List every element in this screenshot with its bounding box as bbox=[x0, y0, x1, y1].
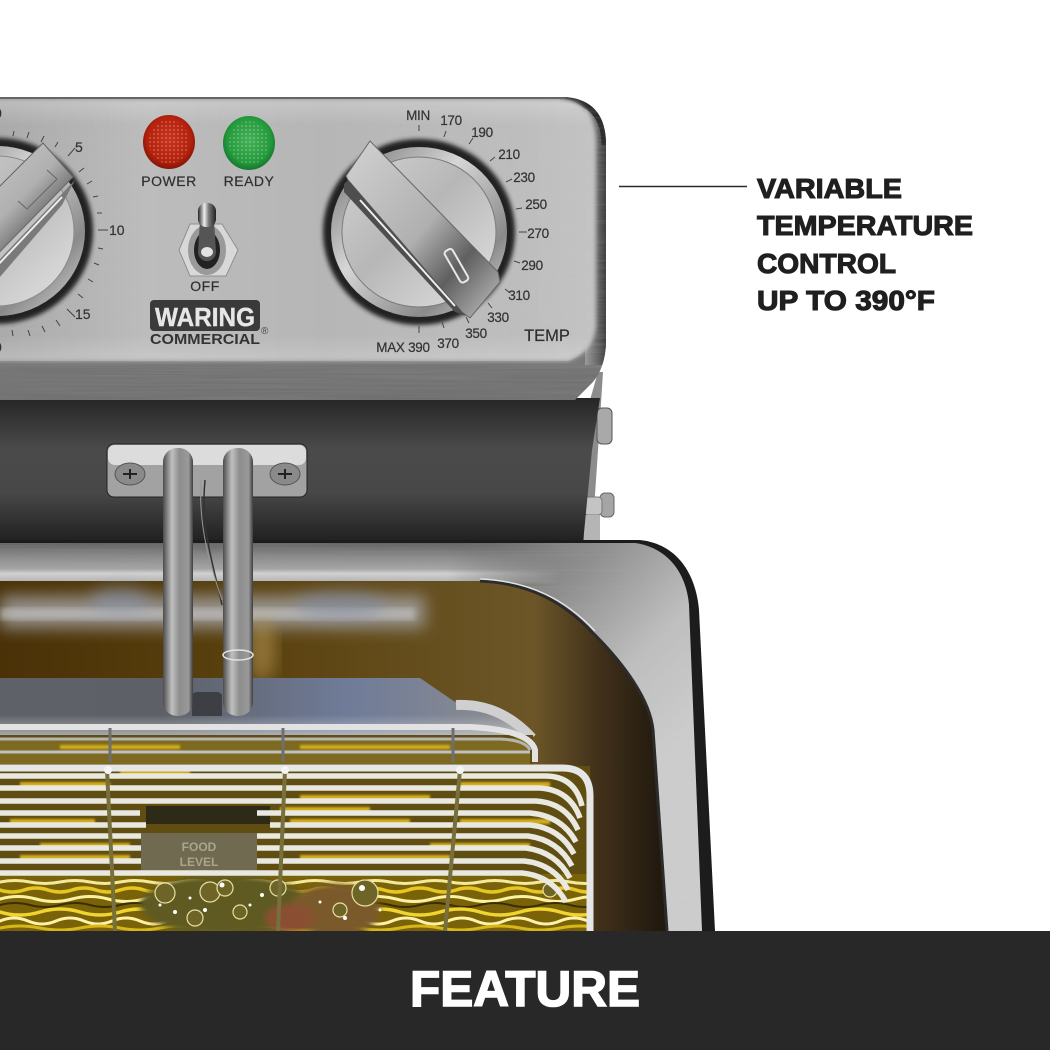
toggle switch: OFF bbox=[190, 278, 220, 294]
callout leader line bbox=[619, 186, 747, 188]
food level plate bbox=[141, 806, 270, 871]
temperature scale: 330 bbox=[487, 310, 509, 325]
front basket bbox=[0, 766, 590, 931]
toggle switch bbox=[179, 203, 238, 294]
temperature scale: 210 bbox=[498, 147, 520, 162]
waring commercial logo: ® bbox=[261, 326, 269, 337]
heating element tubes bbox=[163, 448, 253, 716]
indicator light: power: POWER bbox=[141, 173, 197, 189]
temperature scale: 170 bbox=[440, 113, 462, 128]
indicator light: ready: READY bbox=[224, 173, 275, 189]
left timer scale: 10 bbox=[109, 222, 125, 238]
oil and frying food bbox=[0, 735, 612, 936]
temperature scale: 270 bbox=[527, 226, 549, 241]
fryer rear bolts bbox=[578, 372, 614, 540]
temperature scale: MIN bbox=[406, 108, 430, 123]
temperature scale: 250 bbox=[525, 197, 547, 212]
temperature scale: 310 bbox=[508, 288, 530, 303]
indicator light: ready bbox=[223, 116, 275, 189]
waring commercial logo bbox=[150, 300, 269, 348]
callout text: TEMPERATURE bbox=[757, 210, 973, 241]
temperature scale bbox=[376, 108, 570, 355]
heating element bracket bbox=[107, 444, 307, 497]
rear basket bbox=[0, 727, 535, 762]
fryer dark body bbox=[0, 398, 600, 543]
control panel bbox=[0, 95, 610, 405]
rear basket plate bbox=[0, 678, 535, 745]
left timer scale: 5 bbox=[75, 139, 83, 155]
temperature scale: 350 bbox=[465, 326, 487, 341]
waring commercial logo: COMMERCIAL bbox=[150, 331, 260, 348]
footer bar bbox=[0, 931, 1050, 1050]
indicator light: power bbox=[141, 115, 197, 189]
temperature scale: 370 bbox=[437, 336, 459, 351]
fry tank bbox=[0, 540, 716, 931]
left timer scale: 15 bbox=[75, 306, 91, 322]
temperature scale: 290 bbox=[521, 258, 543, 273]
callout text: VARIABLE bbox=[757, 173, 902, 204]
left timer scale bbox=[0, 105, 125, 355]
waring commercial logo: WARING bbox=[155, 302, 255, 332]
callout text: UP TO 390°F bbox=[757, 285, 935, 316]
left timer dial bbox=[0, 138, 93, 324]
food level plate: LEVEL bbox=[180, 855, 218, 869]
temperature scale: 230 bbox=[513, 170, 535, 185]
footer bar: FEATURE bbox=[410, 961, 640, 1017]
temperature scale: TEMP bbox=[524, 327, 570, 345]
callout text bbox=[757, 173, 973, 316]
callout text: CONTROL bbox=[757, 248, 896, 279]
temperature scale: MAX 390 bbox=[376, 340, 430, 355]
temperature dial bbox=[323, 139, 515, 325]
temperature scale: 190 bbox=[471, 125, 493, 140]
food level plate: FOOD bbox=[182, 840, 217, 854]
